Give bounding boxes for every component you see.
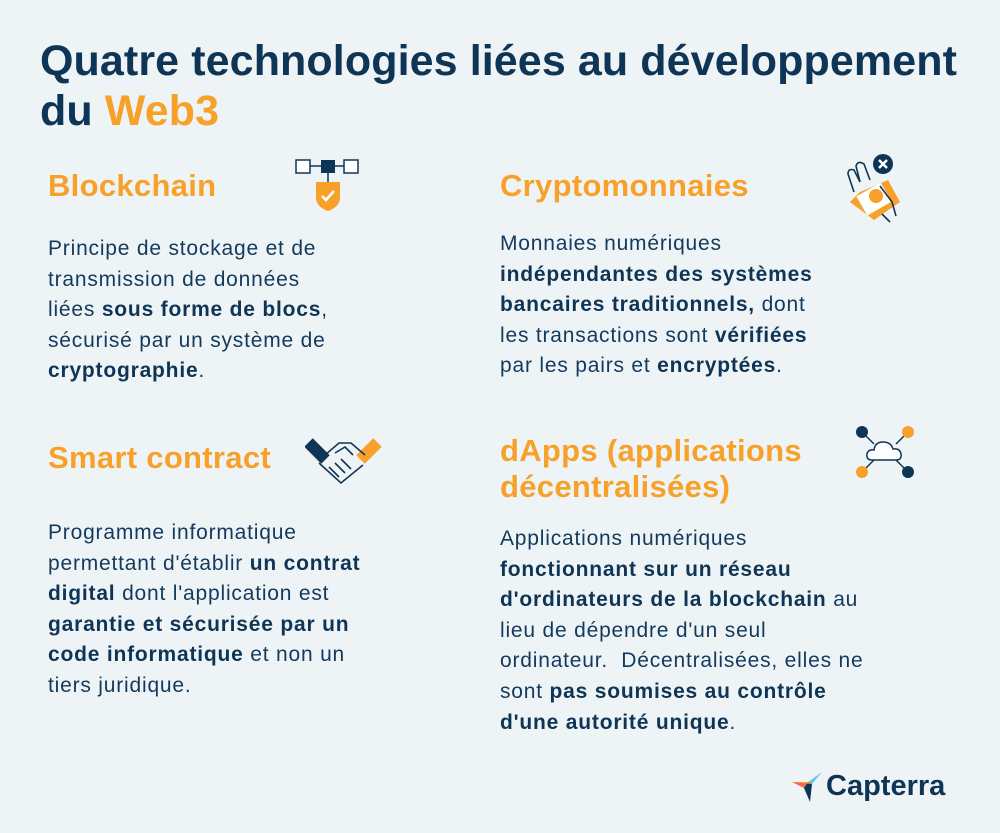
heading: Cryptomonnaies: Cryptomonnaies — [500, 168, 749, 203]
text: dapps description: lieu de dépendre d'un seul — [500, 619, 767, 642]
title: Quatre technologies liées au développement — [40, 37, 957, 85]
text: crypto description — [500, 232, 813, 377]
heading: dApps: décentralisées) — [500, 469, 730, 504]
title: du Web3 — [40, 87, 219, 135]
text: blockchain description — [48, 237, 328, 382]
logo: Capterra: Capterra — [826, 770, 945, 802]
text: smart contract description — [48, 521, 360, 697]
icon: dapps network cloud — [856, 426, 914, 478]
heading: dApps: dApps (applications — [500, 433, 802, 468]
heading: dApps — [500, 433, 802, 504]
text: blockchain description: transmission de données — [48, 268, 300, 291]
text: crypto description: les transactions sont vérifiées — [500, 324, 807, 347]
text: dapps description: Applications numériques — [500, 527, 747, 550]
text: smart contract description: permettant d'établir un contrat — [48, 552, 360, 575]
text: smart contract description: garantie et sécurisée par un — [48, 613, 349, 636]
text: smart contract description: digital dont l'application est — [48, 582, 329, 605]
icon: crypto hand with bill — [847, 154, 900, 223]
text: smart contract description: code informatique et non un — [48, 643, 345, 666]
icon: handshake — [305, 438, 382, 484]
text: dapps description: d'ordinateurs de la blockchain au — [500, 588, 858, 611]
text: crypto description: Monnaies numériques — [500, 232, 722, 255]
title — [40, 37, 957, 135]
text: crypto description: bancaires traditionnels, dont — [500, 293, 806, 316]
text: blockchain description: Principe de stockage et de — [48, 237, 316, 260]
text: blockchain description: liées sous forme de blocs, — [48, 298, 328, 321]
icon: blockchain — [295, 159, 359, 211]
text: blockchain description: cryptographie. — [48, 359, 205, 382]
text: dapps description: ordinateur. Décentralisées, elles ne — [500, 649, 863, 672]
text: smart contract description: tiers juridique. — [48, 674, 192, 697]
text: dapps description: d'une autorité unique. — [500, 711, 736, 734]
text: blockchain description: sécurisé par un système de — [48, 329, 326, 352]
heading: Smart contract: Smart contract — [48, 440, 271, 475]
text: smart contract description: Programme informatique — [48, 521, 297, 544]
heading: Blockchain: Blockchain — [48, 168, 216, 203]
text: dapps description: sont pas soumises au contrôle — [500, 680, 827, 703]
text: crypto description: indépendantes des systèmes — [500, 263, 813, 286]
text: dapps description — [500, 527, 863, 734]
text: dapps description: fonctionnant sur un réseau — [500, 558, 792, 581]
text: crypto description: par les pairs et encryptées. — [500, 354, 783, 377]
